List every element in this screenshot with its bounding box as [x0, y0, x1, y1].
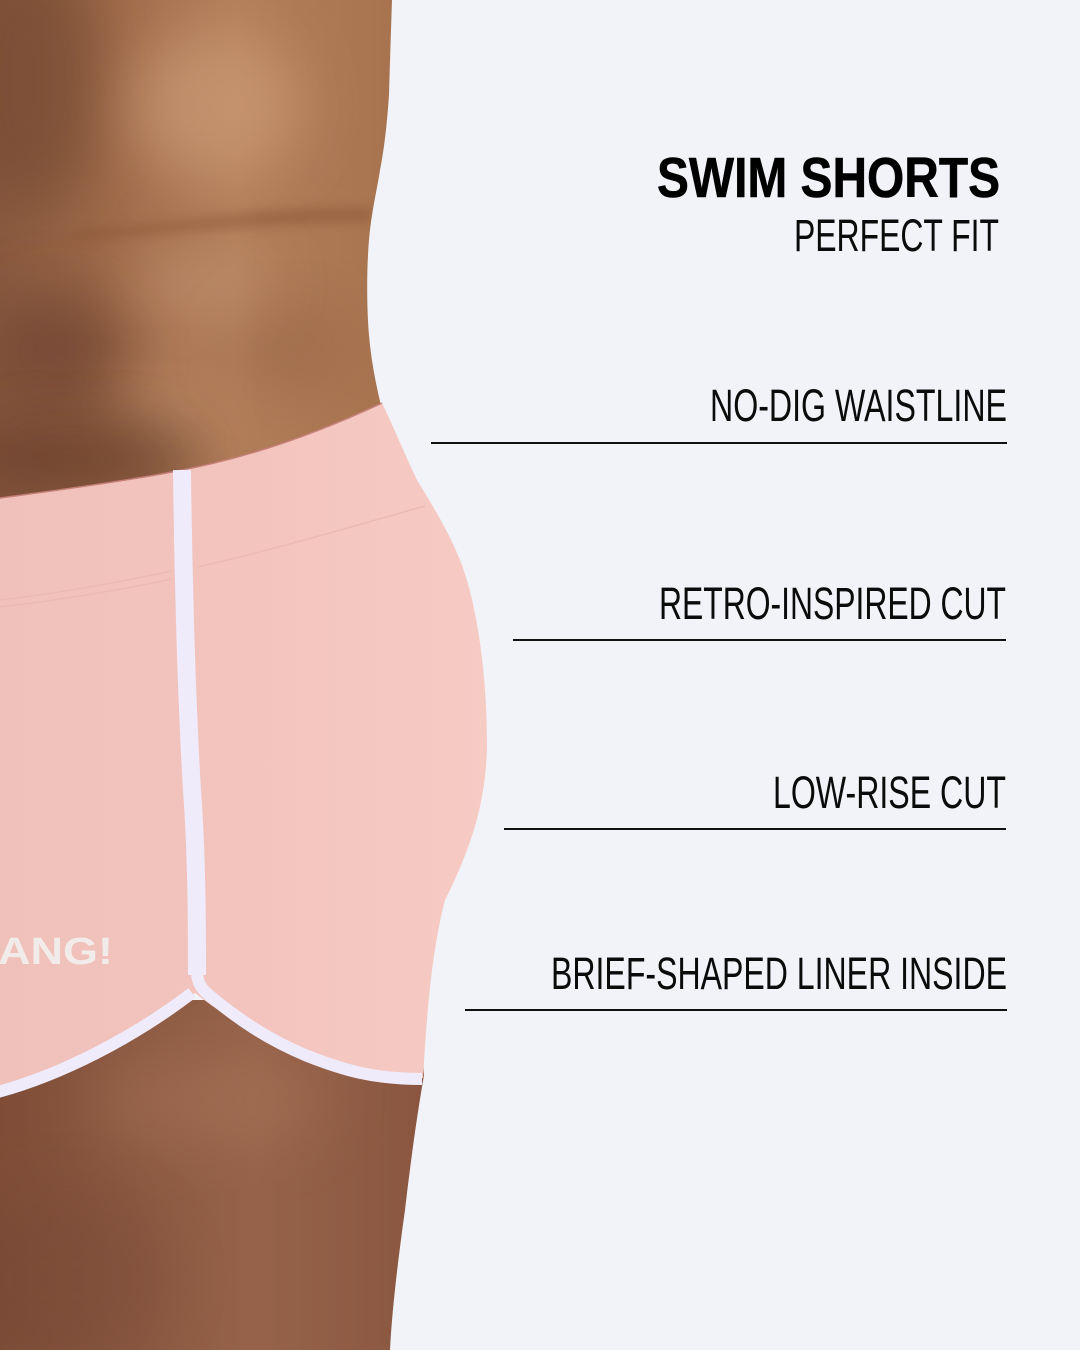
subtitle: PERFECT FIT	[794, 210, 999, 261]
photo: leg	[0, 1000, 424, 1350]
waistband seam	[0, 506, 425, 607]
white piping: side seam	[182, 470, 197, 975]
title: SWIM SHORTS	[657, 146, 1000, 210]
white piping: right hem	[197, 972, 422, 1079]
white piping: left hem	[0, 993, 192, 1092]
photo: pink swim shorts	[0, 403, 487, 1095]
waistband edge	[0, 403, 382, 498]
logo on shorts: ANG!	[0, 931, 113, 973]
photo: torso	[0, 0, 392, 498]
